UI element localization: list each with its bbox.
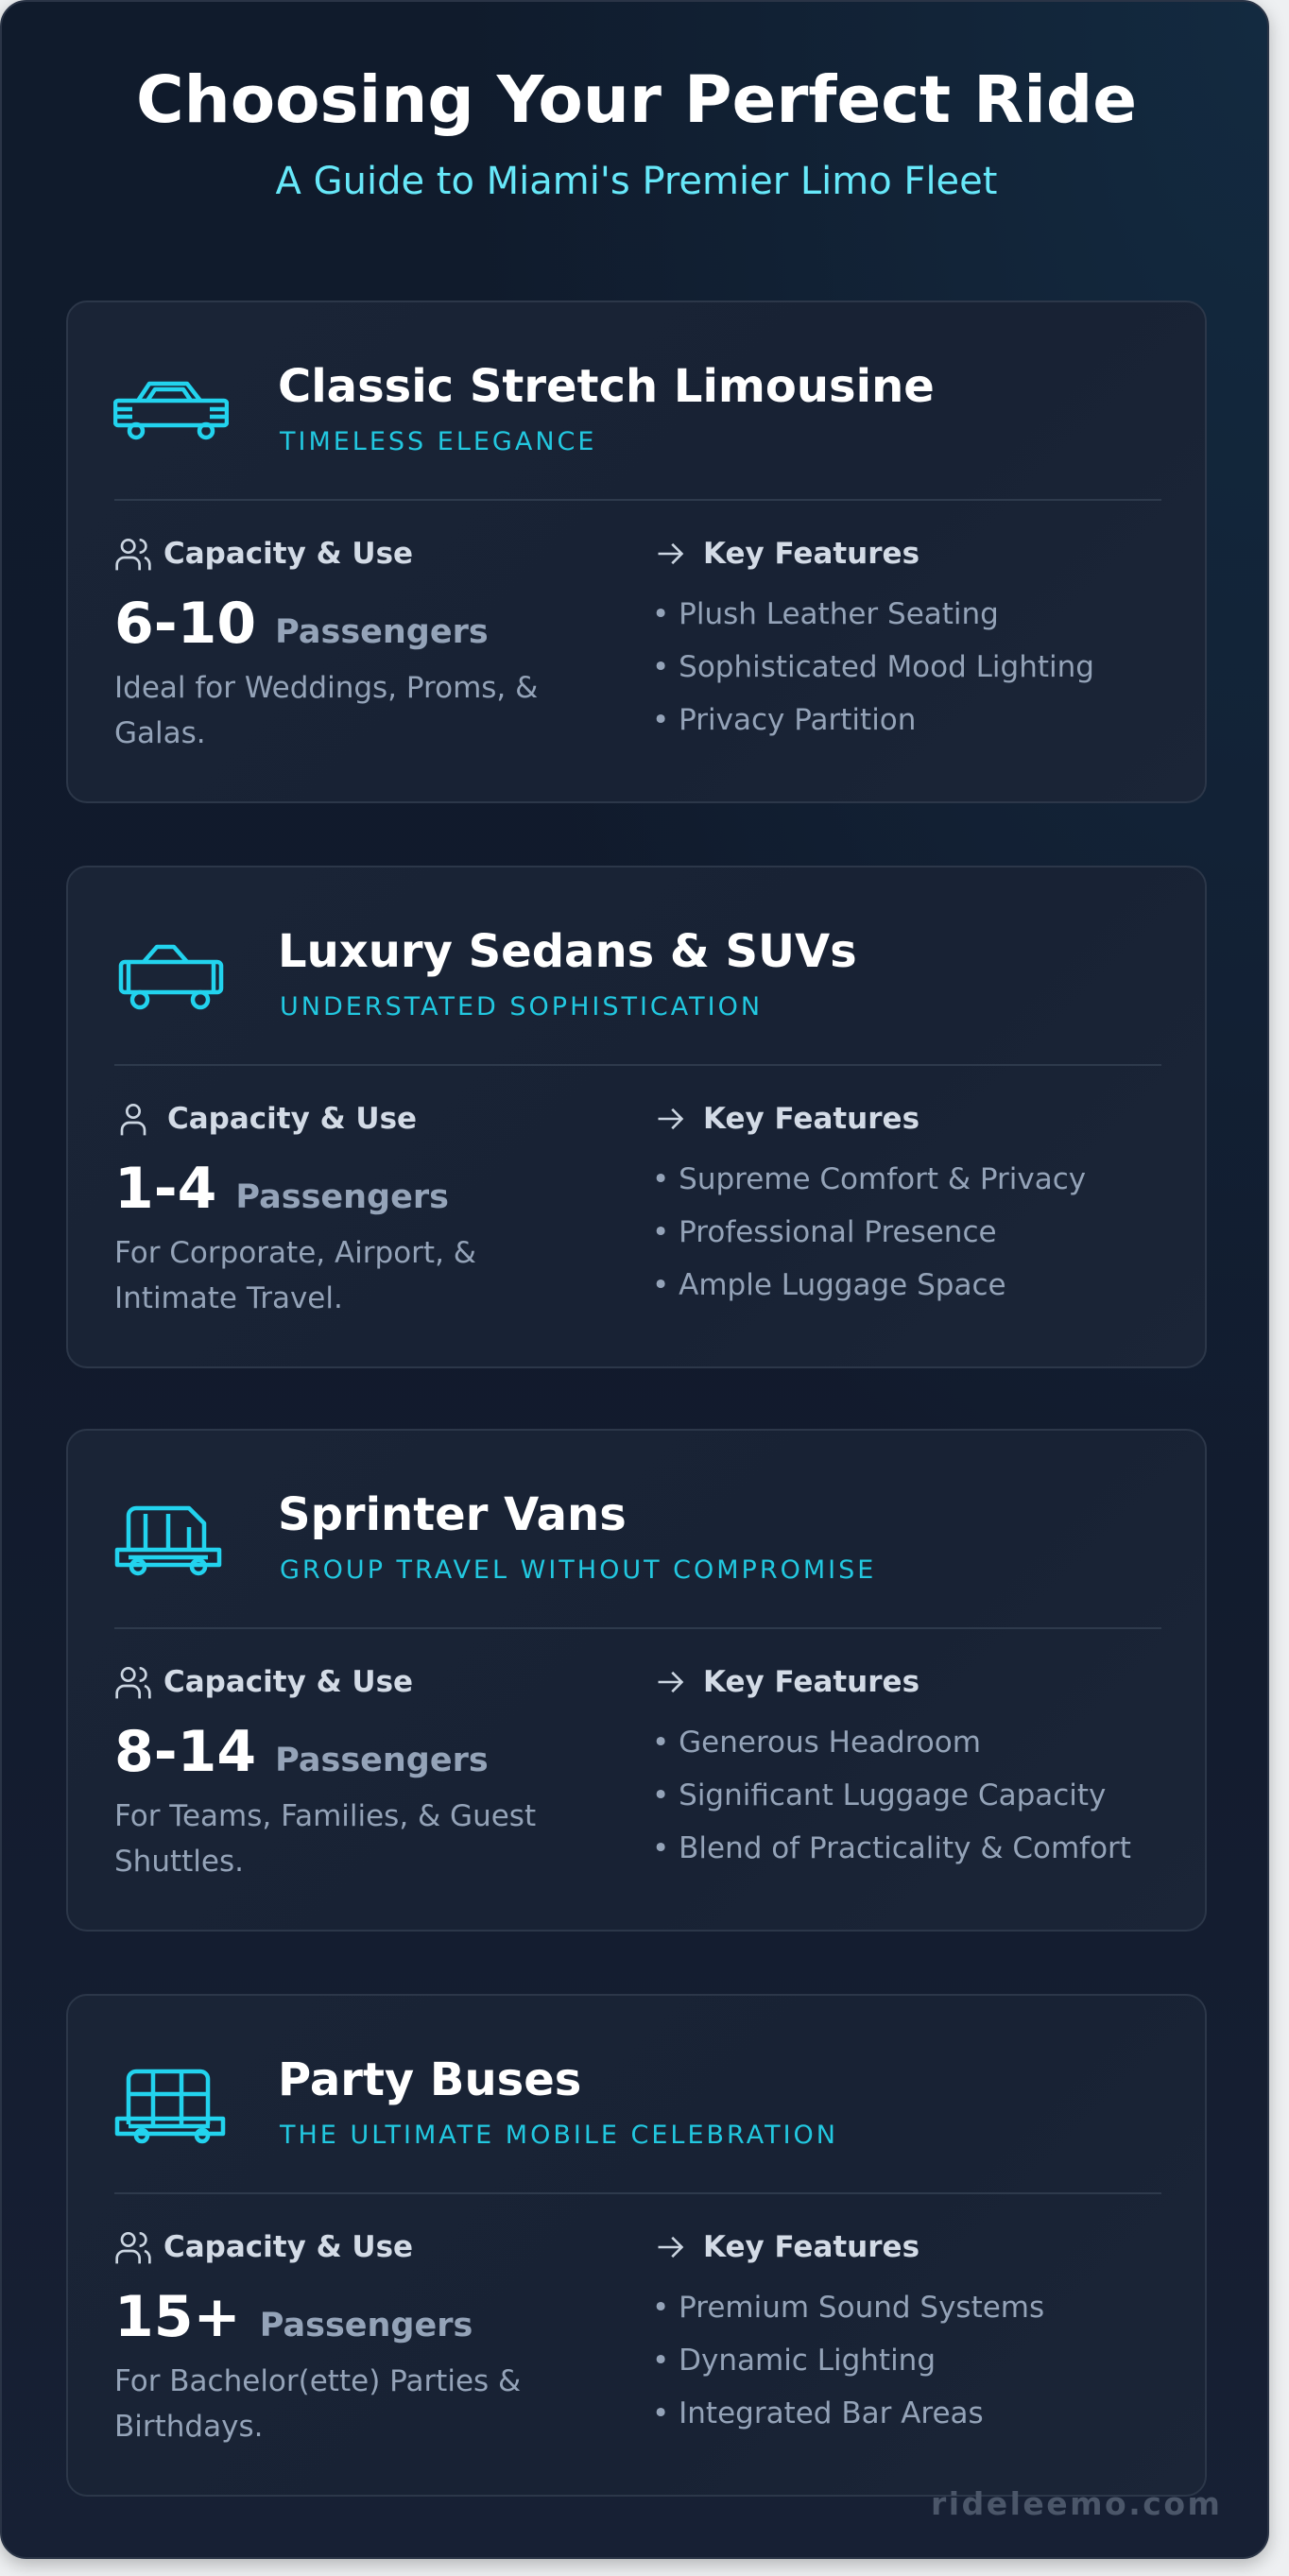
panel: classic stretch limousine (66, 301, 1207, 803)
feature list: • Significant Luggage Capacity (652, 1778, 1106, 1812)
use description: For Teams, Families, & Guest Shuttles. (114, 1799, 536, 1879)
feature list (652, 1162, 1086, 1302)
feature list: • Privacy Partition (652, 703, 916, 737)
label: key features: Key Features (703, 1665, 919, 1699)
panel: sprinter vans (66, 1429, 1207, 1932)
passenger count: 15+ Passengers (114, 2284, 473, 2350)
feature list (652, 1726, 1131, 1865)
use description: For Corporate, Airport, & Intimate Travel. (114, 1236, 476, 1315)
tagline: GROUP TRAVEL WITHOUT COMPROMISE (280, 1555, 876, 1585)
icon: sedan (119, 945, 223, 1009)
heading: Party Buses (278, 2053, 581, 2106)
label: key features: Key Features (703, 537, 919, 571)
feature list: • Premium Sound Systems (652, 2291, 1044, 2325)
feature list: • Professional Presence (652, 1215, 997, 1249)
heading: Luxury Sedans & SUVs (278, 925, 857, 978)
panel: luxury sedans & SUVs (66, 866, 1207, 1368)
feature list: • Blend of Practicality & Comfort (652, 1831, 1131, 1865)
tagline: THE ULTIMATE MOBILE CELEBRATION (280, 2121, 838, 2150)
icon: van (115, 1506, 221, 1576)
icon: bus (115, 2069, 225, 2143)
feature list: • Plush Leather Seating (652, 597, 999, 631)
feature list: • Dynamic Lighting (652, 2344, 936, 2378)
feature list (652, 2291, 1044, 2430)
heading: Sprinter Vans (278, 1488, 627, 1541)
heading: Classic Stretch Limousine (278, 360, 935, 413)
passenger count: 1-4 Passengers (114, 1156, 449, 1222)
title: Choosing Your Perfect Ride (136, 62, 1137, 138)
tagline: TIMELESS ELEGANCE (280, 427, 596, 456)
passenger count: 8-14 Passengers (114, 1719, 489, 1785)
use description: Ideal for Weddings, Proms, & Galas. (114, 671, 538, 750)
feature list: • Integrated Bar Areas (652, 2396, 984, 2430)
feature list (652, 597, 1094, 737)
label: capacity: Capacity & Use (163, 537, 413, 571)
panel: party buses (66, 1994, 1207, 2497)
feature list: • Ample Luggage Space (652, 1268, 1006, 1302)
use description: For Bachelor(ette) Parties & Birthdays. (114, 2364, 521, 2444)
passenger count: 6-10 Passengers (114, 591, 489, 657)
label: capacity: Capacity & Use (163, 1665, 413, 1699)
label: key features: Key Features (703, 2230, 919, 2264)
feature list: • Generous Headroom (652, 1726, 981, 1760)
footer watermark: rideleemo.com (931, 2485, 1222, 2522)
tagline: UNDERSTATED SOPHISTICATION (280, 992, 763, 1022)
feature list: • Supreme Comfort & Privacy (652, 1162, 1086, 1196)
label: key features: Key Features (703, 1102, 919, 1136)
feature list: • Sophisticated Mood Lighting (652, 650, 1094, 684)
label: capacity: Capacity & Use (163, 2230, 413, 2264)
subtitle: A Guide to Miami's Premier Limo Fleet (276, 160, 997, 203)
label: capacity: Capacity & Use (167, 1102, 417, 1136)
icon: limousine (113, 382, 229, 440)
